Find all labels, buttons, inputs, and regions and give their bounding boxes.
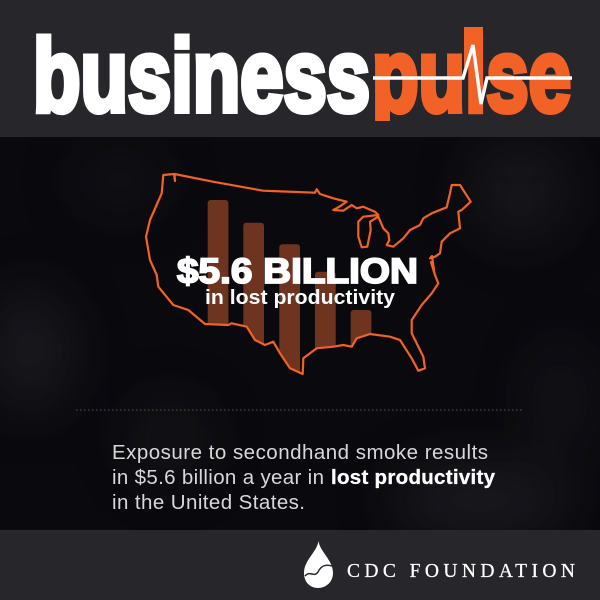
map with bars <box>146 174 471 384</box>
body text: lost productivity <box>331 466 496 489</box>
body text <box>112 441 496 514</box>
logo: business: business <box>33 18 370 133</box>
body text: in the United States. <box>112 491 305 514</box>
header band <box>0 0 600 137</box>
bar chart <box>208 200 371 384</box>
icon: CDC Foundation drop <box>304 541 333 588</box>
body text: in $5.6 billion a year in <box>112 466 330 489</box>
body text: Exposure to secondhand smoke results <box>112 441 488 464</box>
headline figure: $5.6 BILLION <box>177 252 418 291</box>
headline subtitle: in lost productivity <box>205 287 396 309</box>
dotted divider <box>76 409 524 411</box>
background blurred smoke <box>0 140 590 535</box>
footer band <box>0 530 600 600</box>
CDC Foundation wordmark: CDC FOUNDATION <box>347 561 575 582</box>
pulse line <box>373 45 572 104</box>
US outline <box>146 174 471 374</box>
